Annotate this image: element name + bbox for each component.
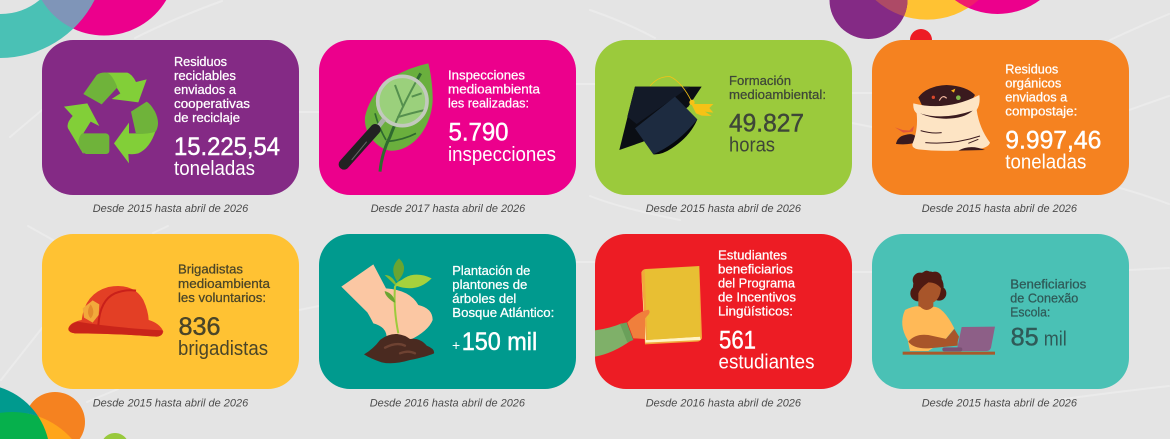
heading: de reciclaje: [174, 111, 240, 125]
value: horas: [729, 135, 775, 157]
heading: Brigadistas: [178, 263, 243, 277]
value: [729, 110, 804, 157]
caption: Desde 2016 hasta abril de 2026: [646, 398, 802, 410]
panel: estudiantes: [595, 234, 852, 389]
value: +: [452, 337, 460, 353]
heading: Beneficiarios: [1010, 277, 1086, 291]
heading: Inspecciones: [448, 68, 525, 82]
caption: Desde 2015 hasta abril de 2026: [93, 203, 249, 215]
icon: recycling arrows: [64, 73, 158, 163]
icon: hand holding book: [595, 266, 702, 357]
value: [178, 313, 268, 360]
value: 9.997,46: [1005, 126, 1101, 154]
heading: Escola:: [1010, 306, 1050, 320]
panel: brigadistas: [42, 234, 299, 389]
heading: Residuos: [174, 55, 227, 69]
heading: compostaje:: [1005, 104, 1077, 118]
heading: Residuos: [1005, 62, 1058, 76]
heading: reciclables: [174, 69, 236, 83]
value: estudiantes: [718, 352, 814, 374]
icon: graduation cap: [619, 77, 713, 154]
heading: Formación: [729, 74, 791, 88]
heading: plantones de: [452, 278, 527, 292]
heading: [1010, 277, 1086, 320]
decorative circles: top right: [830, 0, 1040, 40]
heading: les realizadas:: [448, 97, 529, 111]
value: 836: [178, 313, 220, 341]
icon: woman with laptop: [902, 271, 995, 355]
heading: les voluntarios:: [178, 291, 266, 305]
heading: [174, 55, 250, 125]
value: [1005, 126, 1101, 173]
value: toneladas: [174, 158, 255, 180]
heading: de Incentivos: [718, 291, 796, 305]
caption: Desde 2015 hasta abril de 2026: [922, 398, 1078, 410]
value: 561: [719, 326, 756, 354]
decorative circles: bottom left: [0, 387, 126, 439]
heading: [452, 264, 554, 320]
value: 15.225,54: [174, 133, 280, 161]
icon: leaf and magnifier: [344, 63, 433, 172]
panel: plantacion: [319, 234, 576, 389]
caption: Desde 2016 hasta abril de 2026: [370, 398, 526, 410]
heading: de Conexão: [1010, 292, 1078, 306]
value: mil: [1044, 328, 1067, 350]
value: [448, 119, 556, 166]
heading: [718, 248, 796, 319]
heading: enviados a: [1005, 90, 1067, 104]
heading: orgánicos: [1005, 76, 1061, 90]
heading: medioambienta: [448, 82, 540, 96]
heading: Lingüísticos:: [718, 305, 793, 319]
panel: residuos reciclables: [42, 40, 299, 195]
heading: medioambiental:: [729, 88, 826, 102]
heading: del Programa: [718, 277, 795, 291]
value: 49.827: [729, 110, 804, 138]
heading: medioambienta: [178, 277, 270, 291]
caption: Desde 2015 hasta abril de 2026: [922, 203, 1078, 215]
value: 85: [1011, 323, 1039, 351]
heading: cooperativas: [174, 97, 250, 111]
value: 5.790: [448, 119, 508, 147]
heading: Bosque Atlántico:: [452, 306, 554, 320]
icon: firefighter helmet: [68, 286, 163, 337]
heading: árboles del: [452, 292, 516, 306]
heading: [729, 74, 826, 102]
icon: hand planting seedling: [341, 258, 434, 363]
value: 150 mil: [462, 328, 537, 356]
panel: formacion: [595, 40, 852, 195]
heading: Plantación de: [452, 264, 530, 278]
caption: Desde 2015 hasta abril de 2026: [93, 398, 249, 410]
heading: [1005, 62, 1077, 118]
value: [718, 326, 814, 374]
value: [174, 133, 280, 180]
heading: Estudiantes: [718, 248, 787, 262]
value: toneladas: [1005, 151, 1086, 173]
panel: inspecciones: [319, 40, 576, 195]
value: inspecciones: [448, 144, 556, 166]
value: [1011, 323, 1067, 351]
panel: residuos organicos: [872, 40, 1129, 195]
heading: [178, 263, 270, 305]
heading: beneficiarios: [718, 262, 793, 276]
icon: compost sack: [895, 85, 990, 151]
panel: conexao escola: [872, 234, 1129, 389]
heading: enviados a: [174, 83, 236, 97]
decorative circles: top left: [0, 0, 166, 58]
heading: [448, 68, 540, 111]
caption: Desde 2017 hasta abril de 2026: [371, 203, 526, 215]
value: brigadistas: [178, 338, 268, 360]
caption: Desde 2015 hasta abril de 2026: [646, 203, 802, 215]
